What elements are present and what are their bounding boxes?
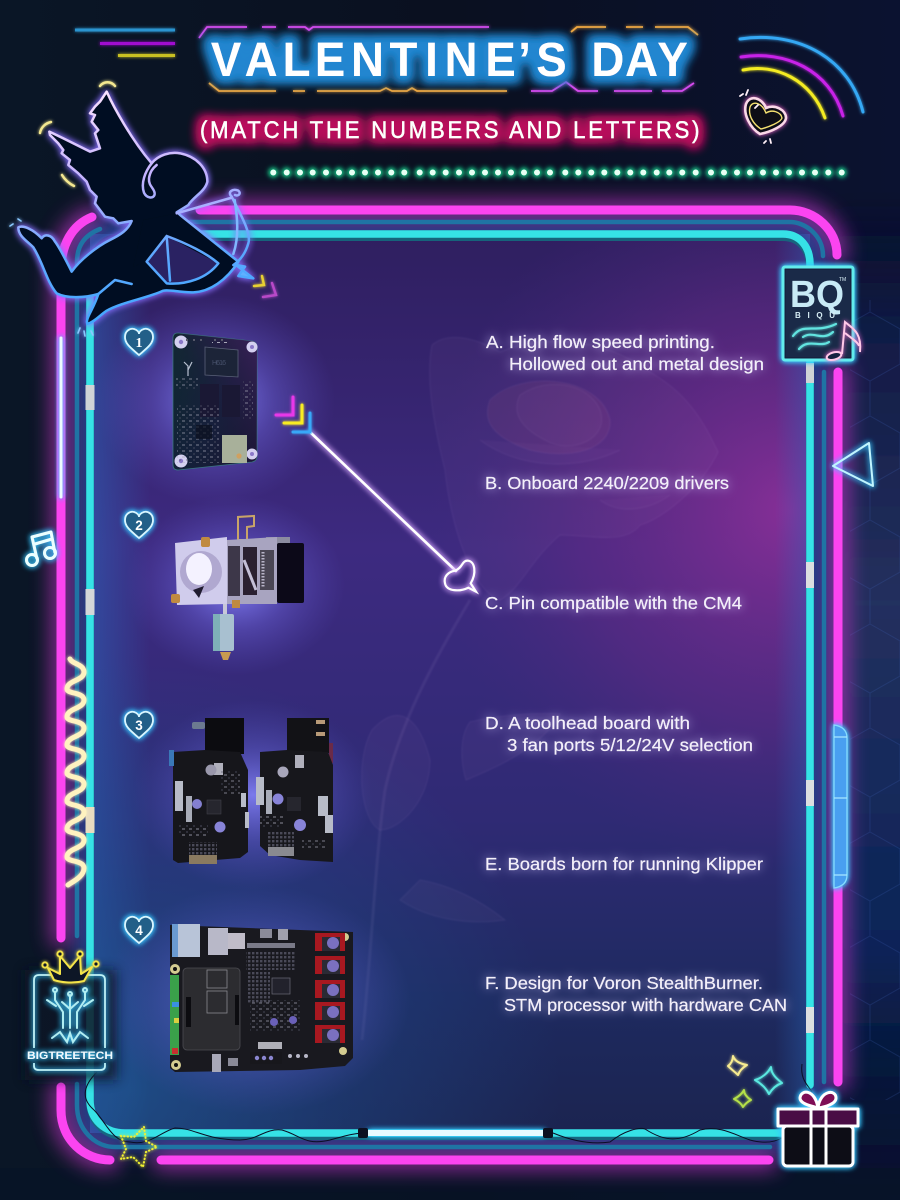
cyan inner tube [90,237,810,1136]
subtitle: (MATCH THE NUMBERS AND LETTERS) [200,116,700,143]
number heart 1 [125,329,153,355]
dotted yellow star [121,1127,157,1167]
cupid [10,82,276,336]
text F: STM processor with hardware CAN [504,995,787,1015]
blue capsule light [834,725,847,888]
title brackets [199,27,698,91]
icon: music note left [26,532,56,566]
match arrow: product 1 to C [276,397,476,592]
product 4: mainboard with drivers [170,924,353,1072]
trademark: TM [839,277,846,283]
sparkles [728,1056,782,1107]
product glows [95,295,410,1115]
BIQU name: BIQU [795,311,835,320]
neon strip on left tube [60,338,62,497]
text D: 3 fan ports 5/12/24V selection [507,735,753,755]
BIGTREETECH text: BIGTREETECH [27,1050,113,1062]
BIQU mark: BQ [790,274,844,316]
neon frame [61,210,838,1160]
tree icon [47,988,93,1042]
title: VALENTINE’S DAY [211,33,688,86]
text F: F. Design for Voron StealthBurner. [485,973,763,993]
number heart 3: 3 [135,718,143,733]
text C: C. Pin compatible with the CM4 [485,593,742,613]
silver tube clips [86,363,814,1033]
red stepper drivers [315,933,345,1043]
text D: D. A toolhead board with [485,713,690,733]
number heart 4 [125,917,153,943]
decorative lines top left [75,30,175,56]
right board [256,718,333,862]
frame halo [61,210,838,1160]
cupid sparks [10,82,276,336]
cupid body and wings [18,92,253,324]
product 2: extruder toolhead [171,516,304,660]
BIQU logo badge [783,267,860,361]
panel: inner gradient area [74,218,828,1151]
BIQU waves [793,324,836,349]
neon rainbow [740,37,863,118]
product 1: compute module board [173,333,258,470]
number heart 2: 2 [135,518,143,533]
icon: neon heart top right [740,90,786,143]
left board [169,718,249,864]
background ghost rose [362,337,718,1040]
number heart 1: 1 [136,336,142,351]
squiggle cream wire [67,659,84,885]
number heart 3 [125,712,153,738]
triangle neon [833,443,873,486]
number heart 4: 4 [135,923,143,938]
thin black wire [85,1064,812,1143]
dotted green divider [273,168,842,178]
bottom white light tube with connectors [358,1128,553,1138]
text A: Hollowed out and metal design [509,354,764,374]
pink music note [826,322,860,361]
crown [42,951,99,983]
text D [485,713,753,755]
text F [485,973,787,1015]
text A: A. High flow speed printing. [486,332,715,352]
magenta outer tube [61,210,838,1160]
product 3: toolhead CAN boards [169,718,333,864]
BIGTREETECH logo badge [25,951,117,1080]
text E: E. Boards born for running Klipper [485,854,763,874]
text A [486,332,764,374]
text B: B. Onboard 2240/2209 drivers [485,473,729,493]
number heart 2 [125,512,153,538]
blue middle tube [77,222,824,1147]
product 1: compute module board: H616 [212,360,226,367]
gift box icon [778,1092,858,1166]
